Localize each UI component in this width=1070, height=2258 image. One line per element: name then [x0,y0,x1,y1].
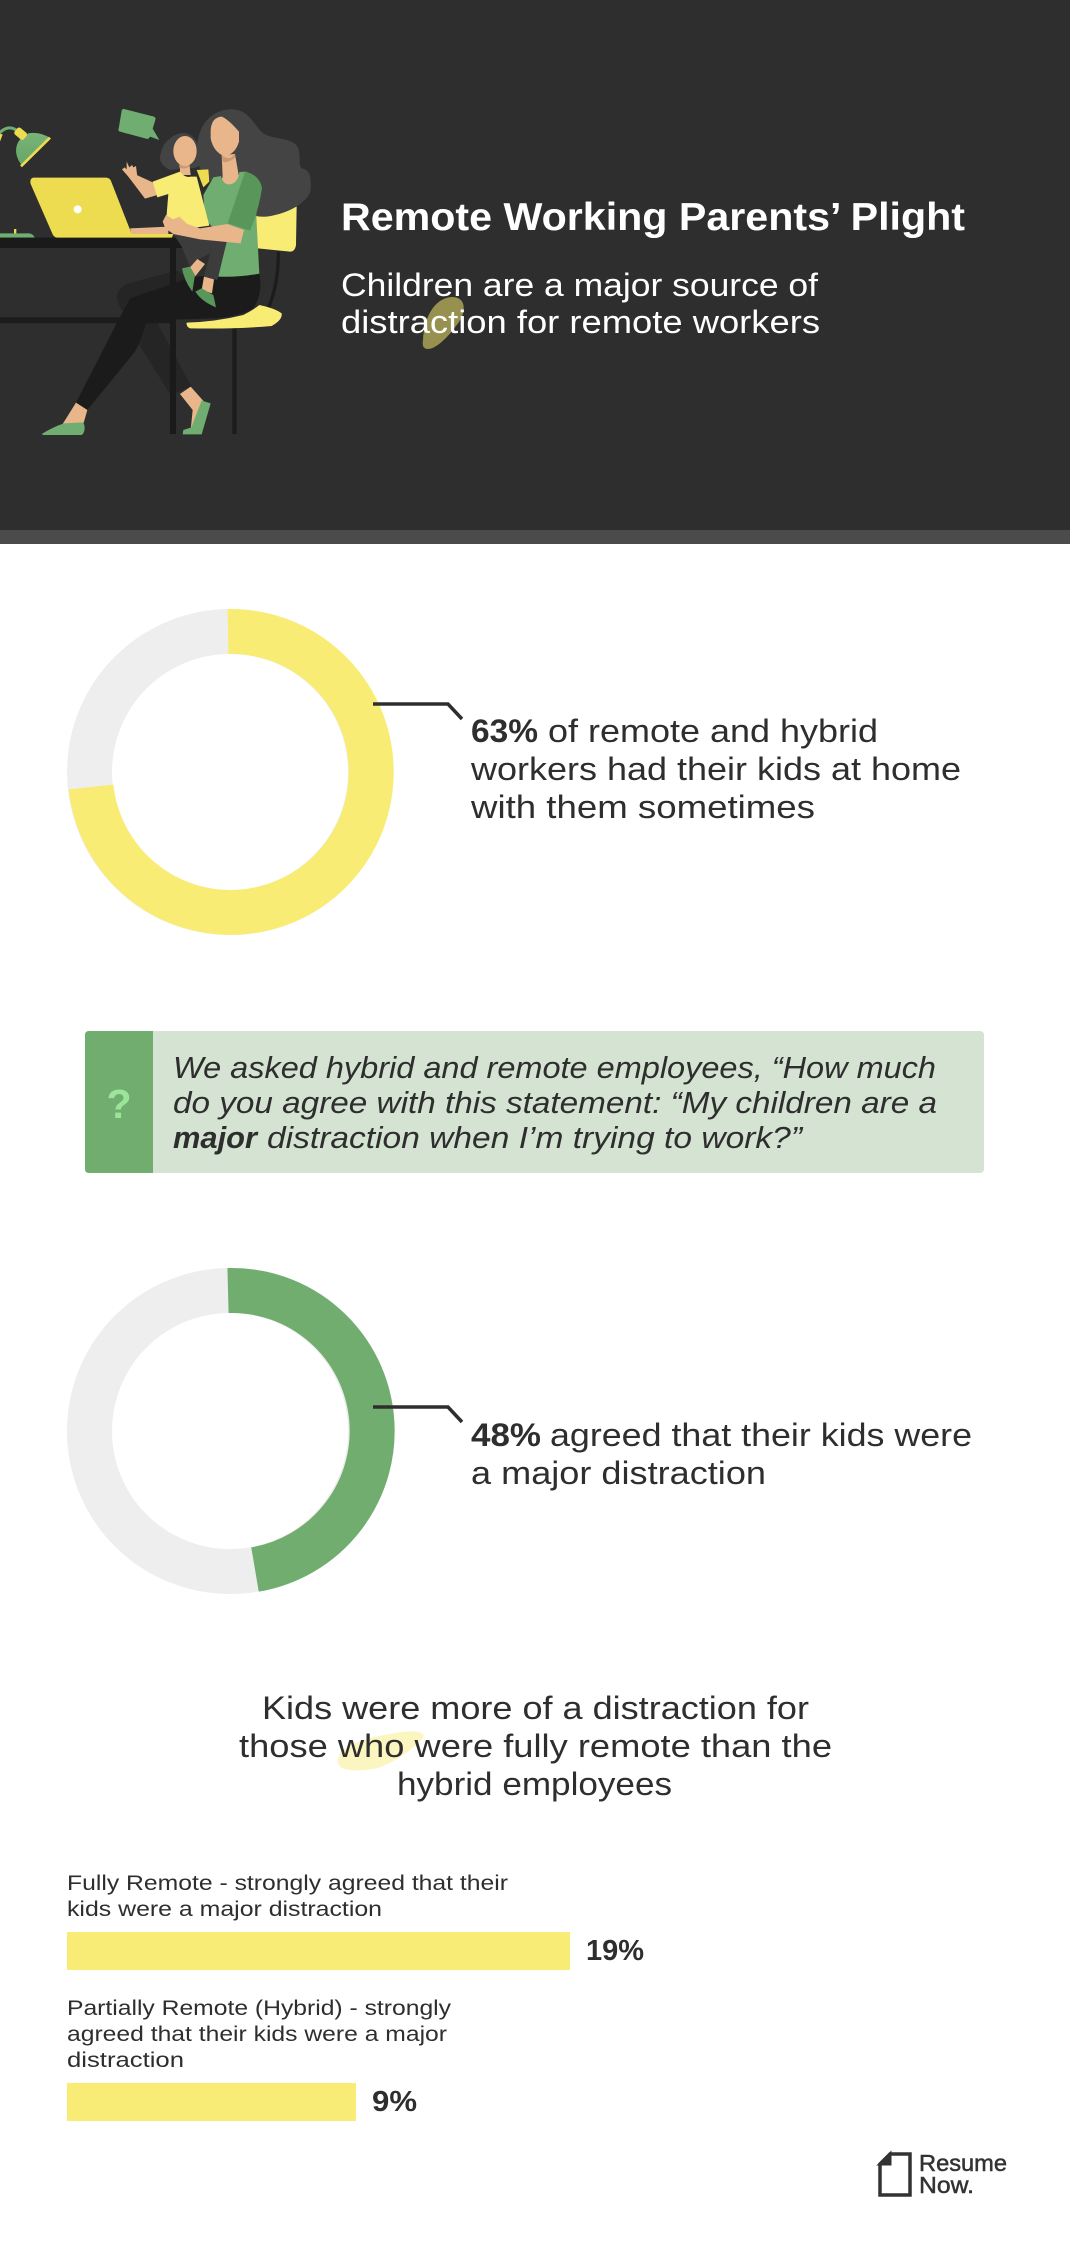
text: 48% statistic: agreed that their kids were [550,1417,972,1453]
subtitle: distraction for remote workers [341,304,820,340]
chair back and stem [232,207,297,434]
question text: We asked hybrid and remote employees, “How much [173,1050,936,1085]
woman's arm and hand [163,215,244,243]
bar: fully remote: kids were a major distraction [67,1897,382,1921]
back foot and shoe [180,387,211,434]
desk [0,247,176,434]
comparison heading [239,1690,832,1802]
donut chart: 63% [90,631,371,912]
icon: question mark: ? [106,1081,132,1127]
title: Remote Working Parents’ Plight [341,196,965,239]
bar: fully remote: 19% [586,1935,644,1967]
text: 63% statistic: workers had their kids at home [470,751,961,787]
text: 63% statistic: with them sometimes [470,789,815,825]
illustration: parent with child at desk [0,109,311,435]
text: 63% statistic [470,713,961,825]
comparison heading: Kids were more of a distraction for [262,1690,809,1726]
icon: speech bubble [118,109,159,140]
logo: Resume Now: Resume [919,2150,1007,2176]
text: 63% statistic: 63% [471,713,538,749]
bar: partially remote: agreed that their kids were a major [67,2022,447,2046]
seat [187,305,282,329]
question text [173,1050,937,1155]
laptop [30,178,173,238]
bar: partially remote: 9% [372,2086,417,2118]
woman's trousers [76,273,260,410]
bar: partially remote: Partially Remote (Hybrid) - strongly [67,1996,451,2020]
logo: Resume Now [880,2150,1007,2198]
question text: do you agree with this statement: “My children are a [173,1085,937,1120]
text: 48% statistic [471,1417,972,1491]
question text: major [173,1120,259,1155]
callout line: 63% [373,704,462,719]
back leg [117,271,200,395]
text: 48% statistic: 48% [471,1417,541,1453]
donut chart: 48% [90,1290,372,1572]
front foot and shoe [42,403,87,435]
woman's top and neck [203,117,262,277]
icon: desk lamp [0,126,50,238]
text: 63% statistic: of remote and hybrid [548,713,878,749]
leaf accent shape [423,297,464,349]
bar: partially remote [67,1996,451,2121]
header panel [0,0,1070,544]
panel: survey question [85,1031,984,1173]
subtitle [341,267,820,340]
comparison heading: those who were fully remote than the [239,1728,832,1764]
bar: partially remote: distraction [67,2048,184,2072]
bar: fully remote: Fully Remote - strongly agreed that their [67,1871,508,1895]
child [122,133,227,307]
text: 48% statistic: a major distraction [471,1455,766,1491]
subtitle: Children are a major source of [341,267,818,303]
desk top [0,238,187,248]
question text: distraction when I’m trying to work?” [267,1120,804,1155]
logo: Resume Now: Now. [919,2172,974,2198]
child's legs [173,234,227,280]
highlight blob [338,1731,424,1770]
woman's hair [197,109,311,217]
comparison heading: hybrid employees [397,1766,672,1802]
bar: fully remote [67,1871,644,1970]
callout line: 48% [373,1407,462,1422]
